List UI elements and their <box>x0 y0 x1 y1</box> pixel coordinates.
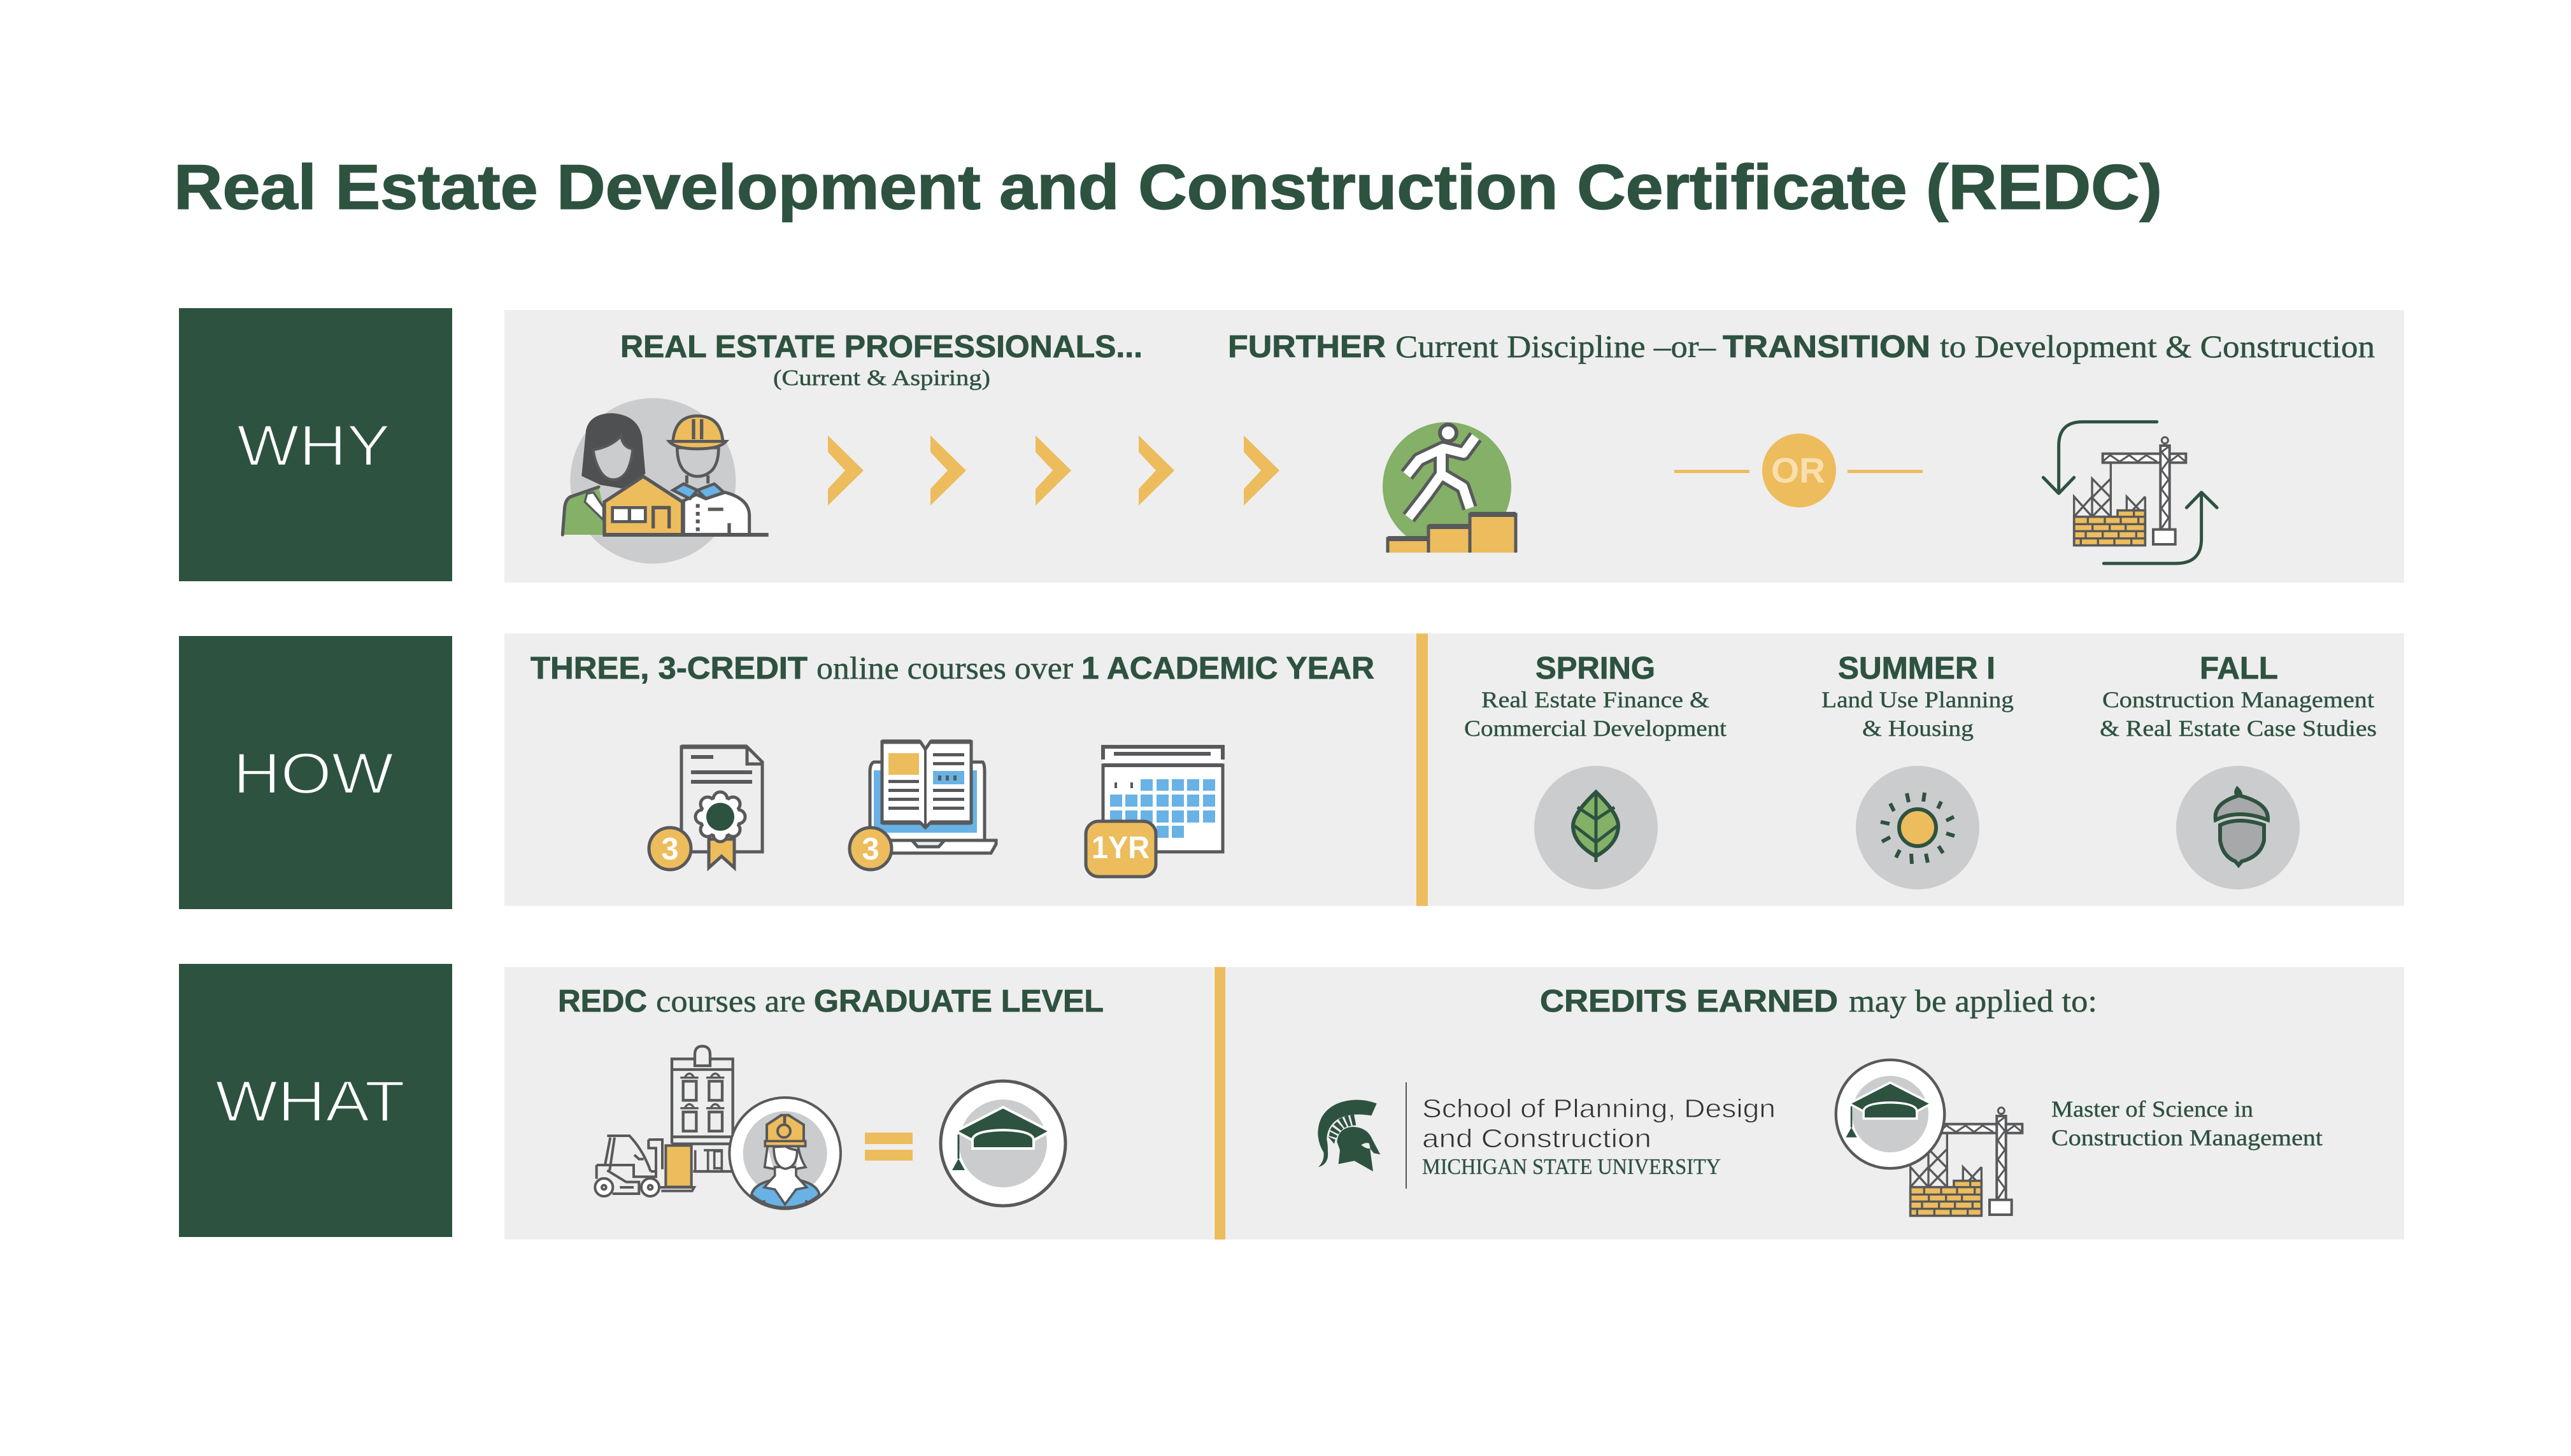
text: school name: MICHIGAN STATE UNIVERSITY <box>1422 1154 1721 1179</box>
semester: summer: Land Use Planning <box>1821 687 2014 712</box>
heading: credits earned <box>1540 983 2097 1019</box>
icon: laptop with book and 3 badge <box>850 742 996 870</box>
building <box>672 1046 733 1171</box>
semester: fall: Construction Management <box>2102 687 2374 712</box>
semester: spring <box>1464 651 1727 889</box>
semester: fall <box>2100 651 2377 889</box>
icon: certificate with 3 badge <box>649 747 762 870</box>
title: Real Estate Development and Construction Certificate (REDC) <box>174 152 2162 222</box>
heading: three 3-credit courses: online courses over <box>816 650 1073 686</box>
icon: laptop with book and 3 badge: 3 <box>862 832 880 866</box>
semester: fall: & Real Estate Case Studies <box>2100 716 2377 741</box>
heading: graduate level: courses are <box>656 983 806 1019</box>
arrows: progression chevrons <box>828 435 1279 505</box>
semester: spring: Real Estate Finance & <box>1481 687 1709 712</box>
icon: certificate with 3 badge: 3 <box>661 832 679 866</box>
panel: what (graduate level) <box>504 967 1214 1240</box>
heading: further or transition: Current Discipline –or– <box>1395 329 1716 364</box>
panel: how (semesters) <box>1428 633 2404 906</box>
forklift <box>595 1136 694 1196</box>
heading: real estate professionals: REAL ESTATE PROFESSIONALS... <box>620 330 1143 364</box>
worker in circle <box>729 1098 841 1209</box>
heading: graduate level <box>558 983 1104 1019</box>
section label: WHAT <box>179 964 452 1237</box>
divider: what panel <box>1214 967 1225 1240</box>
heading: further or transition: FURTHER <box>1228 330 1386 364</box>
icon: professionals with house <box>562 398 769 563</box>
heading: graduate level: REDC <box>558 984 647 1019</box>
panel: why <box>504 310 2404 583</box>
semester: spring: Commercial Development <box>1464 716 1727 741</box>
semester: fall: FALL <box>2200 651 2278 686</box>
logo divider rule <box>1406 1082 1407 1189</box>
icon: graduation cap in circle <box>941 1081 1065 1206</box>
heading: credits earned: may be applied to: <box>1849 983 2097 1019</box>
divider: how panel <box>1416 633 1428 906</box>
icon: person climbing steps <box>1383 422 1516 553</box>
semester: summer <box>1821 651 2014 889</box>
icon: graduation cap in circle <box>1836 1060 1944 1168</box>
logo: MSU spartan helmet <box>1318 1099 1380 1171</box>
heading: three 3-credit courses <box>531 650 1374 686</box>
icon: crane with transition arrows <box>2043 422 2217 563</box>
section label: HOW <box>179 636 452 909</box>
section label: WHAT: WHAT <box>215 1070 405 1134</box>
icon: building, forklift and worker <box>595 1046 841 1209</box>
equals sign <box>865 1133 913 1161</box>
OR divider <box>1674 434 1923 507</box>
section label: WHY <box>179 308 452 581</box>
icon: calendar with 1YR badge: 1YR <box>1092 831 1150 865</box>
panel: what (credits earned) <box>1225 967 2404 1240</box>
heading: credits earned: CREDITS EARNED <box>1540 984 1838 1019</box>
text: master of science: Master of Science in <box>2051 1096 2253 1122</box>
semester: spring: SPRING <box>1535 651 1655 686</box>
heading: further or transition: to Development & Construction <box>1940 329 2375 364</box>
OR divider: OR <box>1771 450 1825 490</box>
heading: graduate level: GRADUATE LEVEL <box>814 984 1104 1019</box>
text: master of science <box>2051 1096 2323 1150</box>
semester: summer: SUMMER I <box>1838 651 1995 686</box>
heading: three 3-credit courses: THREE, 3-CREDIT <box>531 651 808 686</box>
heading: further or transition <box>1228 329 2375 364</box>
text: school name: and Construction <box>1422 1124 1651 1153</box>
section label: WHY: WHY <box>237 414 390 478</box>
text: school name <box>1422 1094 1776 1179</box>
subheading: current and aspiring: (Current & Aspiring) <box>773 365 990 390</box>
icon: crane <box>1911 1108 2022 1216</box>
text: school name: School of Planning, Design <box>1422 1094 1776 1123</box>
heading: three 3-credit courses: 1 ACADEMIC YEAR <box>1081 651 1374 686</box>
section label: HOW: HOW <box>233 742 394 806</box>
semester: summer: & Housing <box>1862 716 1974 741</box>
text: master of science: Construction Management <box>2051 1125 2323 1150</box>
icon: calendar with 1YR badge <box>1086 746 1223 877</box>
heading: further or transition: TRANSITION <box>1723 330 1930 364</box>
panel: how (courses) <box>504 633 1416 906</box>
